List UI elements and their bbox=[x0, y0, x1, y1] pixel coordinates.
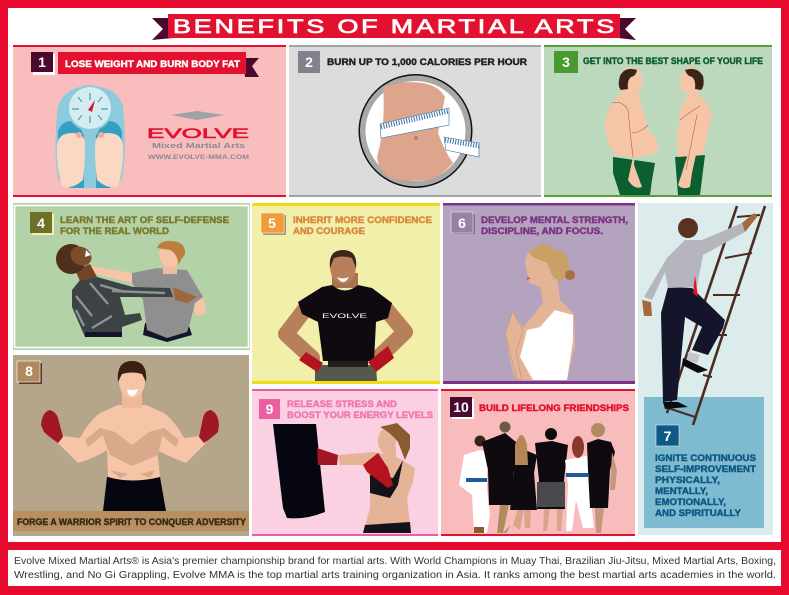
heading 7 bbox=[655, 453, 757, 519]
badge 3: 3 bbox=[562, 54, 570, 70]
friend 2: black shirt bbox=[482, 422, 516, 533]
panel 3: best shape bbox=[544, 45, 772, 197]
figure group: six friends from behind bbox=[459, 422, 617, 533]
panel 1: lose weight bbox=[13, 45, 286, 197]
badge 7: 7 bbox=[664, 428, 672, 444]
ribbon heading 1: LOSE WEIGHT AND BURN BODY FAT bbox=[65, 59, 240, 70]
badge 8: 8 bbox=[25, 363, 33, 379]
panel 7: self-improvement bbox=[638, 203, 773, 535]
figure: attacker in camo rashguard bbox=[56, 243, 197, 337]
logo: Evolve MMA: WWW.EVOLVE-MMA.COM bbox=[148, 155, 249, 161]
figure: confident man in Evolve shirt: EVOLVE bbox=[322, 314, 367, 320]
heading 7: EMOTIONALLY, bbox=[655, 497, 726, 508]
heading 7: MENTALLY, bbox=[655, 486, 708, 497]
icon: bathroom scale with feet bbox=[56, 85, 125, 188]
ribbon heading 1 bbox=[58, 52, 259, 77]
badge 7 bbox=[656, 425, 679, 446]
figure: woman meditating bbox=[505, 243, 575, 380]
heading 5: AND COURAGE bbox=[293, 226, 366, 237]
friend 4: camo shorts bbox=[535, 428, 568, 531]
badge 10 bbox=[450, 397, 474, 419]
badge 6: 6 bbox=[458, 215, 466, 231]
badge 2: 2 bbox=[305, 54, 313, 70]
heading 5 bbox=[293, 215, 433, 237]
logo: Evolve MMA bbox=[147, 111, 249, 161]
heading 4: FOR THE REAL WORLD bbox=[60, 226, 169, 237]
badge 1: 1 bbox=[38, 54, 46, 70]
figure: man climbing ladder bbox=[642, 213, 757, 409]
badge 5 bbox=[261, 213, 286, 235]
badge 6 bbox=[451, 212, 475, 234]
panel 8: warrior spirit bbox=[13, 355, 249, 536]
icon: waist in magnifier with measuring tape bbox=[358, 74, 479, 188]
heading 9: RELEASE STRESS AND bbox=[287, 399, 397, 410]
badge 9 bbox=[259, 399, 280, 419]
heading 9 bbox=[287, 399, 434, 421]
caption 8: FORGE A WARRIOR SPIRIT TO CONQUER ADVERSITY bbox=[17, 517, 247, 528]
footer description bbox=[8, 550, 781, 586]
footer description: Wrestling, and No Gi Grappling, Evolve MMA is the top martial arts training organization in Asia. It ranks among the best martial arts academies in the world. bbox=[14, 570, 776, 581]
heading 7: AND SPIRITUALLY bbox=[655, 508, 742, 519]
heading 6 bbox=[481, 215, 628, 237]
figure: boxer woman bbox=[317, 423, 415, 533]
heading 9: BOOST YOUR ENERGY LEVELS bbox=[287, 410, 434, 421]
friend 1: white gi bbox=[459, 436, 512, 533]
figure: defender in grey shirt bbox=[87, 241, 206, 342]
badge 3 bbox=[554, 51, 578, 73]
badge 4 bbox=[30, 212, 54, 235]
heading 4: LEARN THE ART OF SELF-DEFENSE bbox=[60, 215, 230, 226]
panel 10: friendships bbox=[441, 389, 635, 536]
heading 6: DEVELOP MENTAL STRENGTH, bbox=[481, 215, 628, 226]
badge 9: 9 bbox=[266, 401, 274, 417]
heading 6: DISCIPLINE, AND FOCUS. bbox=[481, 226, 603, 237]
friend 5: white gi, red hair bbox=[565, 436, 610, 531]
heading 7: PHYSICALLY, bbox=[655, 475, 720, 486]
badge 8 bbox=[17, 361, 42, 384]
title banner bbox=[152, 14, 636, 40]
panel 9: release stress bbox=[252, 389, 438, 536]
heading 7: SELF-IMPROVEMENT bbox=[655, 464, 756, 475]
panel 5: confidence bbox=[252, 203, 440, 384]
logo: Evolve MMA: EVOLVE bbox=[147, 125, 249, 141]
figure: overweight man bbox=[605, 67, 658, 195]
heading 4 bbox=[60, 215, 230, 237]
figure: fit man bbox=[675, 67, 712, 195]
heading 3: GET INTO THE BEST SHAPE OF YOUR LIFE bbox=[583, 56, 763, 66]
badge 4: 4 bbox=[37, 215, 45, 231]
friend 3: long hair bbox=[510, 435, 537, 530]
heading 2: BURN UP TO 1,000 CALORIES PER HOUR bbox=[327, 57, 527, 68]
friend 6: black shirt, blond bbox=[587, 423, 617, 533]
panel 4: self-defense bbox=[13, 203, 250, 350]
heading 5: INHERIT MORE CONFIDENCE bbox=[293, 215, 433, 226]
footer description: Evolve Mixed Martial Arts® is Asia's premier championship brand for martial arts. With World Champions in Muay Thai, Brazilian Jiu-Jitsu, Mixed Martial Arts, Boxing, bbox=[14, 556, 776, 567]
logo: Evolve MMA: Mixed Martial Arts bbox=[152, 143, 245, 150]
heading 7: IGNITE CONTINUOUS bbox=[655, 453, 757, 464]
badge 2 bbox=[298, 51, 320, 73]
badge 10: 10 bbox=[453, 399, 469, 415]
ladder bbox=[667, 206, 765, 425]
panel 6: mental strength bbox=[443, 203, 635, 384]
panel 2: burn calories bbox=[289, 45, 541, 197]
badge 1 bbox=[31, 52, 55, 75]
figure: muscular fighter bbox=[41, 361, 219, 511]
title text: BENEFITS OF MARTIAL ARTS bbox=[173, 17, 617, 38]
badge 5: 5 bbox=[268, 215, 276, 231]
figure: confident man in Evolve shirt bbox=[286, 250, 405, 381]
heading 10: BUILD LIFELONG FRIENDSHIPS bbox=[479, 403, 630, 414]
blue caption box bbox=[644, 397, 764, 528]
icon: punching bag bbox=[273, 424, 325, 518]
